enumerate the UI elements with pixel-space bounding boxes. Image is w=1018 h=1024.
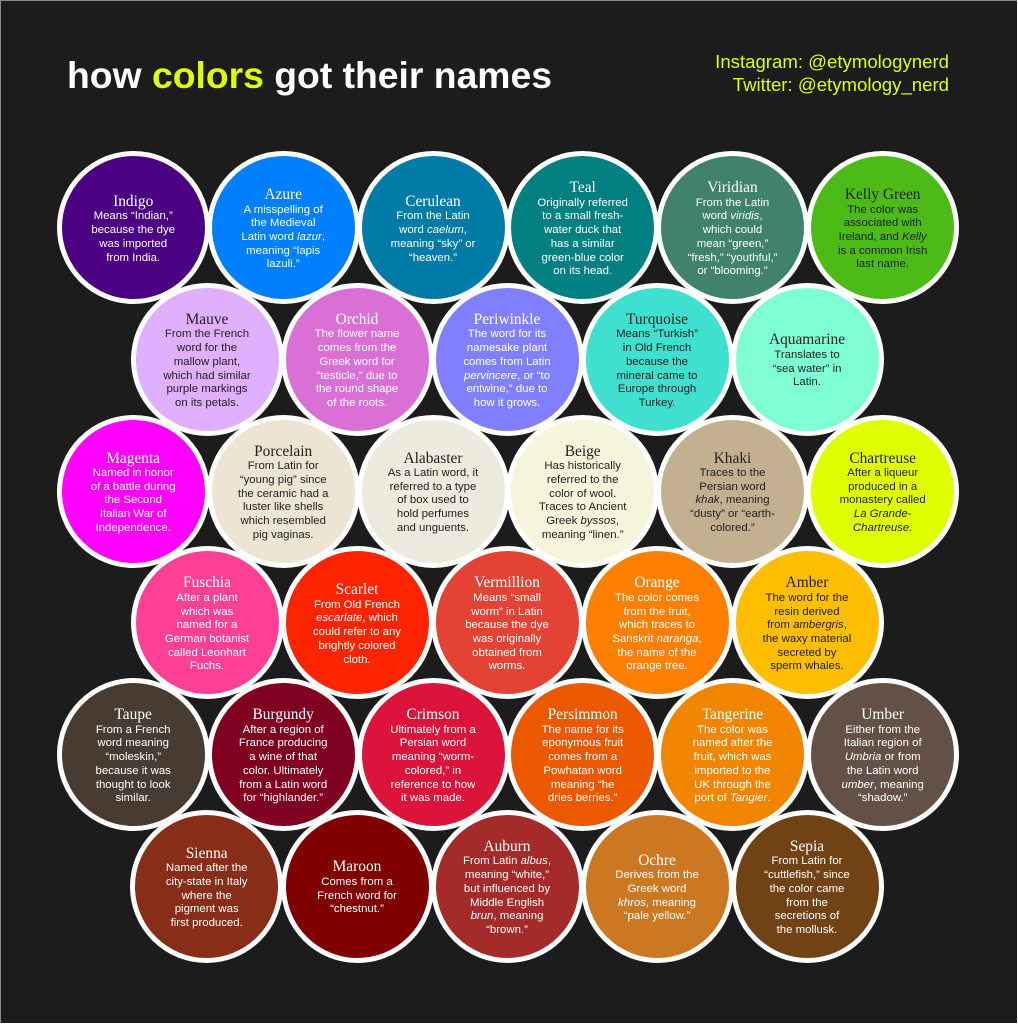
- circle: Khaki: [656, 414, 809, 568]
- circle: Tangerine: named after the: [693, 737, 772, 749]
- circle: Chartreuse: La Grande-: [854, 508, 911, 520]
- circle: Tangerine: imported to the: [694, 765, 770, 777]
- circle: Turquoise: Turkey.: [639, 397, 675, 409]
- circle: Viridian: which could: [703, 224, 762, 236]
- circle: Crimson: Ultimately from a: [390, 724, 476, 736]
- circle: Azure: Azure: [264, 186, 302, 203]
- circle: Porcelain: which resembled: [240, 515, 326, 527]
- circle: Orchid: comes from the: [318, 342, 396, 354]
- circle: Amber: [730, 546, 884, 699]
- circle: Taupe: “moleskin,”: [105, 751, 161, 763]
- circle: Porcelain: the ceramic had a: [238, 488, 328, 500]
- circle: Periwinkle: [430, 283, 584, 436]
- circle: Scarlet: brightly colored: [318, 640, 396, 652]
- circle: Fuschia: [130, 546, 284, 699]
- circle: Cerulean: meaning “sky” or: [391, 238, 475, 250]
- circle: Ochre: [580, 810, 734, 963]
- circle: Fuschia: German botanist: [165, 633, 249, 645]
- circle: Taupe: word meaning: [97, 737, 169, 749]
- circle: Umber: Umbria or from: [845, 751, 921, 763]
- circle: Scarlet: Scarlet: [336, 581, 378, 598]
- circle: Indigo: from India.: [106, 252, 160, 264]
- circle: Mauve: [130, 283, 284, 436]
- circle: Orange: Sanskrit naranga,: [612, 633, 702, 645]
- circle: Burgundy: France producing: [239, 737, 328, 749]
- circle: Aquamarine: [730, 283, 884, 436]
- circle: Maroon: Comes from a: [321, 876, 393, 888]
- circle: Turquoise: [580, 283, 734, 436]
- circle: Indigo: Means “Indian,”: [94, 210, 173, 222]
- circle: Indigo: because the dye: [91, 224, 175, 236]
- circle: Cerulean: “heaven.”: [409, 252, 457, 264]
- circle: Maroon: “chestnut.”: [330, 903, 384, 915]
- circle: Orchid: the round shape: [316, 383, 398, 395]
- circle: Viridian: Viridian: [707, 179, 758, 196]
- circle: Fuschia: which was: [181, 606, 233, 618]
- circle: Persimmon: Persimmon: [548, 706, 618, 723]
- circle: Periwinkle: Periwinkle: [474, 311, 540, 328]
- circle: Alabaster: of box used to: [397, 494, 469, 506]
- circle: Alabaster: hold perfumes: [397, 508, 469, 520]
- circle: Persimmon: meaning “he: [551, 779, 614, 791]
- circle: Crimson: reference to how: [391, 779, 475, 791]
- circle: Khaki: khak, meaning: [695, 494, 770, 506]
- circle: Turquoise: because the: [626, 356, 688, 368]
- circle: Kelly Green: [806, 151, 959, 304]
- circle: Teal: Originally referred: [537, 197, 628, 209]
- circle: Magenta: [57, 414, 210, 568]
- circle: Azure: Latin word lazur,: [241, 231, 325, 243]
- title: how colors got their names: [67, 54, 552, 96]
- circle: Orchid: The flower name: [315, 328, 399, 340]
- circle: Porcelain: [207, 414, 360, 568]
- circle: Amber: secreted by: [778, 647, 836, 659]
- circle: Sienna: pigment was: [175, 903, 239, 915]
- circle: Chartreuse: produced in a: [848, 481, 917, 493]
- circle: Orchid: “testicle,” due to: [316, 370, 398, 382]
- circle: Fuschia: Fuchs.: [190, 660, 224, 672]
- circle: Turquoise: Europe through: [618, 383, 696, 395]
- circle: Chartreuse: [806, 414, 959, 568]
- circle: Viridian: or “blooming.”: [697, 265, 768, 277]
- circle: Burgundy: color. Ultimately: [243, 765, 323, 777]
- circle: Amber: Amber: [786, 574, 828, 591]
- circle: Mauve: Mauve: [186, 311, 228, 328]
- circle: Sienna: first produced.: [171, 917, 243, 929]
- circle: Fuschia: called Leonhart: [168, 647, 246, 659]
- circle: Persimmon: eponymous fruit: [542, 737, 623, 749]
- circle: Azure: [207, 151, 360, 304]
- circle: Sepia: Sepia: [790, 838, 824, 855]
- circle: Burgundy: Burgundy: [253, 706, 314, 723]
- circle: Crimson: meaning “worm-: [392, 751, 474, 763]
- circle: Persimmon: Powhatan word: [543, 765, 622, 777]
- circle: Umber: Umber: [861, 706, 904, 723]
- circle: Crimson: it was made.: [401, 792, 465, 804]
- circle: Chartreuse: After a liqueur: [847, 467, 918, 479]
- circle: Chartreuse: Chartreuse: [849, 450, 916, 467]
- circle: Viridian: From the Latin: [696, 197, 769, 209]
- circle: Mauve: which had similar: [163, 370, 251, 382]
- circle: Persimmon: The name for its: [542, 724, 624, 736]
- circle: Taupe: [57, 678, 210, 831]
- circle: Chartreuse: monastery called: [840, 494, 926, 506]
- circle: Umber: Either from the: [845, 724, 920, 736]
- circle: Beige: referred to the: [547, 474, 618, 486]
- circle: Beige: Greek byssos,: [546, 515, 619, 527]
- circle: Sienna: where the: [182, 890, 232, 902]
- circle: Beige: Traces to Ancient: [539, 501, 626, 513]
- circle: Sepia: from the: [786, 897, 828, 909]
- circle: Taupe: Taupe: [114, 706, 152, 723]
- circle: Vermillion: Vermillion: [474, 574, 540, 591]
- circle: Maroon: French word for: [317, 890, 397, 902]
- circle: Orange: orange tree.: [626, 660, 688, 672]
- circle: Periwinkle: entwine,” due to: [466, 383, 548, 395]
- circle: Azure: meaning “lapis: [246, 245, 320, 257]
- circle: Mauve: From the French: [165, 328, 249, 340]
- circle: Burgundy: from a Latin word: [239, 779, 327, 791]
- circle: Alabaster: As a Latin word, it: [388, 467, 478, 479]
- circle: Maroon: Maroon: [333, 858, 381, 875]
- circle: Tangerine: [656, 678, 809, 831]
- circle: Taupe: because it was: [96, 765, 171, 777]
- circle: Beige: meaning “linen.”: [542, 529, 624, 541]
- circle: Vermillion: obtained from: [472, 647, 542, 659]
- circle: Persimmon: [506, 678, 659, 831]
- circle: Cerulean: word caelum,: [399, 224, 467, 236]
- circle: Auburn: From Latin albus,: [463, 855, 551, 867]
- circle: Turquoise: mineral came to: [616, 370, 698, 382]
- circle: Teal: to a small fresh-: [542, 210, 623, 222]
- circle: Aquamarine: Translates to: [774, 349, 840, 361]
- circle: Teal: green-blue color: [542, 252, 624, 264]
- circle: Crimson: Persian word: [400, 737, 466, 749]
- circle: Ochre: Greek word: [628, 883, 686, 895]
- circle: Maroon: [280, 810, 434, 963]
- circle: Scarlet: cloth.: [343, 654, 371, 666]
- circle: Periwinkle: how it grows.: [474, 397, 540, 409]
- circle: Alabaster: Alabaster: [404, 450, 462, 467]
- circle: Mauve: word for the: [177, 342, 237, 354]
- circle: Scarlet: could refer to any: [313, 626, 401, 638]
- circle: Vermillion: [430, 546, 584, 699]
- circle: Tangerine: The color was: [697, 724, 768, 736]
- circle: Auburn: Auburn: [483, 838, 530, 855]
- circle: Ochre: Ochre: [638, 852, 676, 869]
- circle: Orange: which traces to: [619, 619, 695, 631]
- circle: Sepia: [730, 810, 884, 963]
- circle: Auburn: brun, meaning: [471, 910, 543, 922]
- circle: Periwinkle: The word for its: [468, 328, 546, 340]
- circle: Amber: the waxy material: [763, 633, 851, 645]
- circle: Viridian: [656, 151, 809, 304]
- circle: Sienna: city-state in Italy: [166, 876, 248, 888]
- circle: Umber: [806, 678, 959, 831]
- circle: Tangerine: port of Tangier.: [694, 792, 771, 804]
- circle: Azure: lazuli.”: [267, 258, 300, 270]
- circle: Khaki: “dusty” or “earth-: [690, 508, 775, 520]
- circle: Burgundy: for “highlander.”: [243, 792, 323, 804]
- circle: Kelly Green: Ireland, and Kelly: [839, 231, 927, 243]
- circle: Khaki: colored.”: [710, 522, 755, 534]
- circle: Fuschia: named for a: [177, 619, 237, 631]
- circle: Vermillion: was originally: [473, 633, 541, 645]
- circle: Magenta: Magenta: [106, 450, 160, 467]
- circle: Burgundy: [207, 678, 360, 831]
- circle: Sepia: “cuttlefish,” since: [764, 869, 850, 881]
- circle: Cerulean: Cerulean: [405, 193, 461, 210]
- circle: Indigo: [57, 151, 210, 304]
- circle: Crimson: [356, 678, 510, 831]
- circle: Mauve: on its petals.: [175, 397, 239, 409]
- circle: Sienna: Sienna: [186, 845, 228, 862]
- circle: Umber: umber, meaning: [842, 779, 924, 791]
- circle: Magenta: Italian War of: [100, 508, 167, 520]
- circle: Turquoise: Turquoise: [626, 311, 688, 328]
- circle: Magenta: the Second: [104, 494, 162, 506]
- circle: Magenta: of a battle during: [91, 481, 176, 493]
- circle: Magenta: Named in honor: [93, 467, 174, 479]
- circle: Vermillion: because the dye: [465, 619, 549, 631]
- circle: Sepia: secretions of: [775, 910, 839, 922]
- circle: Taupe: From a French: [96, 724, 171, 736]
- circle: Ochre: Derives from the: [615, 869, 699, 881]
- circle: Amber: resin derived: [774, 606, 840, 618]
- circle: Indigo: was imported: [99, 238, 167, 250]
- circle: Orchid: of the roots.: [327, 397, 387, 409]
- circle: Amber: sperm whales.: [770, 660, 844, 672]
- circle: Indigo: Indigo: [113, 193, 153, 210]
- social handles: Instagram: @etymologynerd: [715, 51, 949, 72]
- circle: Aquamarine: Latin.: [793, 376, 821, 388]
- circle: Vermillion: worm” in Latin: [471, 606, 543, 618]
- circle: Amber: The word for the: [766, 592, 848, 604]
- circle: Porcelain: luster like shells: [243, 501, 323, 513]
- circle: Auburn: “brown.”: [486, 924, 528, 936]
- circle: Ochre: “pale yellow.”: [624, 910, 690, 922]
- circle: Sienna: Named after the: [166, 862, 248, 874]
- circle: Umber: “shadow.”: [858, 792, 907, 804]
- circle: Alabaster: and unguents.: [397, 522, 469, 534]
- circle: Kelly Green: Kelly Green: [845, 186, 920, 203]
- circle: Burgundy: After a region of: [243, 724, 324, 736]
- circle: Orange: from the fruit,: [623, 606, 691, 618]
- circle: Azure: the Medieval: [251, 217, 315, 229]
- circle: Fuschia: Fuschia: [183, 574, 231, 591]
- circle: Viridian: mean “green,”: [697, 238, 768, 250]
- circle: Viridian: word viridis,: [702, 210, 763, 222]
- circle: Crimson: Crimson: [406, 706, 460, 723]
- circle: Alabaster: [356, 414, 510, 568]
- circle: Khaki: Traces to the: [699, 467, 766, 479]
- circle: Khaki: Khaki: [714, 450, 751, 467]
- circle: Beige: Beige: [565, 443, 601, 460]
- circle: Porcelain: “young pig” since: [240, 474, 327, 486]
- circle: Teal: has a similar: [551, 238, 615, 250]
- social handles: Twitter: @etymology_nerd: [733, 74, 949, 95]
- circle: Vermillion: Means “small: [473, 592, 541, 604]
- circle: Scarlet: escarlate, which: [316, 612, 398, 624]
- circle: Orange: Orange: [634, 574, 680, 591]
- circle: Crimson: colored,” in: [405, 765, 461, 777]
- circle: Azure: A misspelling of: [244, 204, 323, 216]
- circle: Orchid: Greek word for: [319, 356, 395, 368]
- circle: Porcelain: pig vaginas.: [253, 529, 314, 541]
- circle: Orange: the name of the: [617, 647, 697, 659]
- circle: Scarlet: [280, 546, 434, 699]
- circle: Sepia: the mollusk.: [777, 924, 837, 936]
- circle: Turquoise: in Old French: [623, 342, 691, 354]
- circle: Kelly Green: last name.: [856, 258, 909, 270]
- circle: Scarlet: From Old French: [314, 599, 400, 611]
- circle: Beige: Has historically: [544, 460, 621, 472]
- circle: Ochre: khros, meaning: [618, 897, 696, 909]
- circle: Aquamarine: “sea water” in: [772, 363, 842, 375]
- circle: Cerulean: [356, 151, 510, 304]
- circle: Mauve: mallow plant,: [174, 356, 240, 368]
- circle: Tangerine: fruit, which was: [694, 751, 771, 763]
- circle: Auburn: Middle English: [470, 897, 544, 909]
- circle: Beige: [506, 414, 659, 568]
- circle: Kelly Green: associated with: [844, 217, 922, 229]
- circle: Sienna: [130, 810, 283, 963]
- circle: Orange: The color comes: [615, 592, 699, 604]
- circle: Alabaster: referred to a type: [390, 481, 476, 493]
- circle: Tangerine: UK through the: [694, 779, 771, 791]
- circle: Tangerine: Tangerine: [702, 706, 763, 723]
- circle: Persimmon: dries berries.”: [548, 792, 618, 804]
- circle: Mauve: purple markings: [166, 383, 248, 395]
- circle: Cerulean: From the Latin: [396, 210, 470, 222]
- circle: Sepia: From Latin for: [772, 855, 842, 867]
- circle: Kelly Green: is a common Irish: [838, 245, 927, 257]
- circle: Umber: the Latin word: [847, 765, 918, 777]
- circle: Kelly Green: The color was: [847, 204, 918, 216]
- circle: Periwinkle: namesake plant: [467, 342, 547, 354]
- circle: Orchid: Orchid: [336, 311, 378, 328]
- circle: Periwinkle: pervincere, or “to: [464, 370, 550, 382]
- circle: Vermillion: worms.: [489, 660, 525, 672]
- social handles: [715, 51, 949, 95]
- circle: Amber: from ambergris,: [767, 619, 847, 631]
- circle: Teal: [506, 151, 659, 304]
- circle: Porcelain: Porcelain: [254, 443, 312, 460]
- circle: Beige: color of wool.: [549, 488, 616, 500]
- circle: Orchid: [280, 283, 434, 436]
- circle: Viridian: “fresh,” “youthful,”: [688, 252, 777, 264]
- circle: Chartreuse: Chartreuse.: [853, 522, 912, 534]
- circle: Fuschia: After a plant: [176, 592, 238, 604]
- circle: Teal: Teal: [570, 179, 596, 196]
- circle: Magenta: Independence.: [95, 522, 171, 534]
- circle: Taupe: thought to look: [96, 779, 171, 791]
- circle: Teal: water duck that: [544, 224, 621, 236]
- circle: Auburn: [430, 810, 584, 963]
- circle: Periwinkle: comes from Latin: [463, 356, 551, 368]
- circle: Orange: [580, 546, 734, 699]
- circle: Taupe: similar.: [115, 792, 151, 804]
- circle: Sepia: the color came: [770, 883, 844, 895]
- circle: Teal: on its head.: [553, 265, 612, 277]
- circle: Umber: Italian region of: [844, 737, 922, 749]
- circle: Burgundy: a wine of that: [249, 751, 317, 763]
- circle: Turquoise: Means “Turkish”: [616, 328, 698, 340]
- circle: Khaki: Persian word: [699, 481, 766, 493]
- circle: Persimmon: comes from a: [548, 751, 617, 763]
- circle: Auburn: meaning “white,”: [465, 869, 549, 881]
- circle: Porcelain: From Latin for: [248, 460, 319, 472]
- circle: Aquamarine: Aquamarine: [769, 331, 845, 348]
- circle: Auburn: but influenced by: [464, 883, 550, 895]
